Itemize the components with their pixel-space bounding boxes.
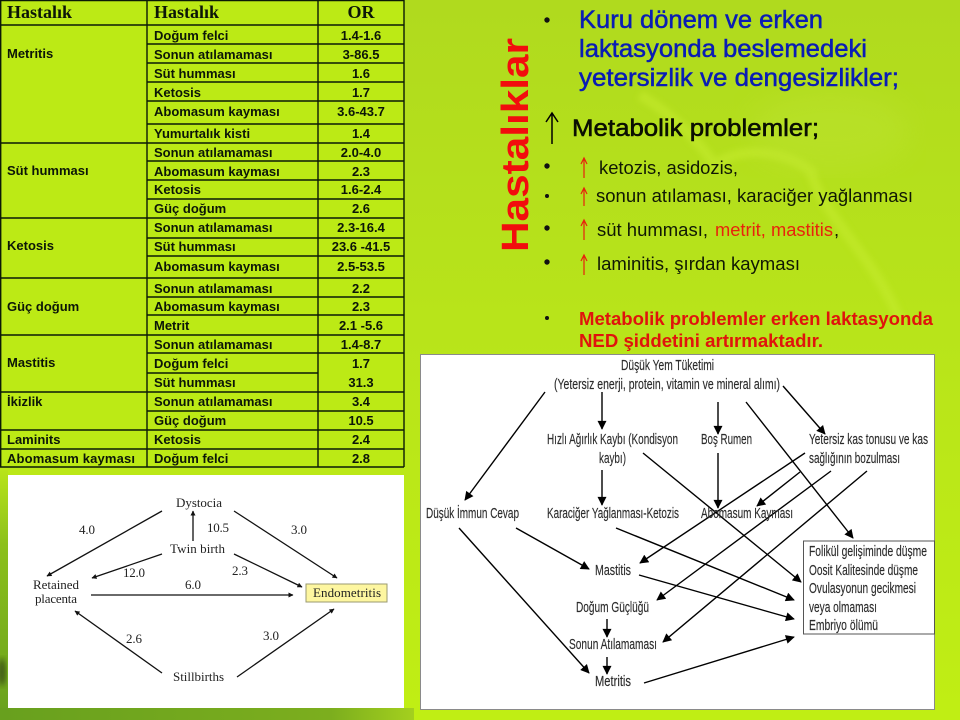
labels: placenta [35,591,77,606]
right column: OR values: 3.4 [352,394,371,409]
middle column: related diseases: Sonun atılamaması [154,337,272,352]
labels: Karaciğer Yağlanması-Ketozis [547,505,679,522]
middle column: related diseases: Abomasum kayması [154,259,280,274]
left column: primary diseases: Abomasum kayması [7,451,135,466]
table header: Hastalık [7,2,72,22]
right column: OR values: 1.4-8.7 [341,337,381,352]
middle column: related diseases: Abomasum kayması [154,299,280,314]
left column: primary diseases: Mastitis [7,355,55,370]
labels: Düşük İmmun Cevap [426,504,519,522]
table header [7,2,376,22]
text block: nutrition heading: Kuru dönem ve erken [579,6,823,34]
left column: primary diseases: Güç doğum [7,299,79,314]
middle column: related diseases: Yumurtalık kisti [154,126,250,141]
right column: OR values: 2.1 -5.6 [339,318,383,333]
right column: OR values [332,28,390,466]
middle column: related diseases: Abomasum kayması [154,164,280,179]
right column: OR values: 2.3 [352,164,370,179]
right column: OR values: 2.3 [352,299,370,314]
panel: endometritis risk diagram [8,475,404,708]
middle column: related diseases: Metrit [154,318,190,333]
outcomes box: veya olmaması [809,599,877,616]
middle column: related diseases: Sonun atılamaması [154,220,272,235]
right column: OR values: 2.2 [352,281,370,296]
labels: 10.5 [207,520,229,535]
labels: Retained [33,577,80,592]
right column: OR values: 3-86.5 [343,47,379,62]
right column: OR values: 2.5-53.5 [337,259,385,274]
bullet list: problems: sonun atılaması, karaciğer yağlanması [596,185,913,206]
labels: Boş Rumen [701,431,752,448]
right column: OR values: 1.6-2.4 [341,182,382,197]
labels: Abomasum Kayması [701,505,793,522]
outcomes box [804,541,934,634]
right column: OR values: 1.6 [352,66,370,81]
left column: primary diseases: Metritis [7,46,53,61]
labels [33,495,381,684]
middle column: related diseases: Ketosis [154,182,201,197]
labels: Twin birth [170,541,226,556]
labels [426,357,928,690]
bullet list: problems [544,157,913,275]
right column: OR values: 10.5 [348,413,374,428]
callout: NED [545,309,934,351]
callout: NED: Metabolik problemler erken laktasyonda [579,309,934,329]
table: disease odds ratios [0,0,404,467]
right column: OR values: 31.3 [348,375,374,390]
middle column: related diseases: Sonun atılamaması [154,47,272,62]
middle column: related diseases: Ketosis [154,432,201,447]
labels: sağlığının bozulması [809,450,900,467]
labels: 3.0 [263,628,279,643]
right column: OR values: 1.4 [352,126,371,141]
right column: OR values: 1.7 [352,85,370,100]
labels: 3.0 [291,522,307,537]
labels: Doğum Güçlüğü [576,599,649,616]
text block: nutrition heading: yetersizlik ve dengesizlikler; [579,64,899,92]
labels: 6.0 [185,577,201,592]
middle column: related diseases: Ketosis [154,85,201,100]
text block: metabolic problems: Metabolik problemler; [572,115,819,142]
labels: (Yetersiz enerji, protein, vitamin ve mineral alımı) [554,376,780,393]
middle column: related diseases: Güç doğum [154,201,226,216]
left column: primary diseases: Süt humması [7,163,89,178]
arrows [459,386,867,683]
middle column: related diseases: Süt humması [154,375,236,390]
outcomes box: Embriyo ölümü [809,617,878,634]
middle column: related diseases: Süt humması [154,239,236,254]
callout: NED: NED şiddetini artırmaktadır. [579,331,823,351]
right column: OR values: 2.3-16.4 [337,220,386,235]
left column: primary diseases [7,46,135,466]
left column: primary diseases: Laminits [7,432,60,447]
labels: 2.6 [126,631,142,646]
middle column: related diseases: Süt humması [154,66,236,81]
right column: OR values: 1.4-1.6 [341,28,381,43]
labels: Mastitis [595,562,631,579]
bullet list: problems: ketozis, asidozis, [599,157,738,178]
table header: OR [348,2,376,22]
bullet list: problems: metrit, mastitis [715,219,833,240]
labels: 4.0 [79,522,95,537]
middle column: related diseases [154,28,280,466]
right column: OR values: 3.6-43.7 [337,104,385,119]
bullet list: problems: , [834,219,839,240]
labels: Dystocia [176,495,222,510]
middle column: related diseases: Doğum felci [154,28,228,43]
right column: OR values: 2.4 [352,432,371,447]
vertical heading: Hastalıklar [495,38,537,252]
middle column: related diseases: Güç doğum [154,413,226,428]
middle column: related diseases: Doğum felci [154,356,228,371]
arrows [47,511,337,677]
middle column: related diseases: Doğum felci [154,451,228,466]
panel: low feed intake flow diagram [420,354,934,710]
middle column: related diseases: Abomasum kayması [154,104,280,119]
text block: nutrition heading [544,6,899,92]
labels: Hızlı Ağırlık Kaybı (Kondisyon [547,431,678,448]
labels: Metritis [595,673,631,690]
labels: Düşük Yem Tüketimi [621,357,714,374]
labels: Sonun Atılamaması [569,636,657,653]
left column: primary diseases: İkizlik [7,394,43,409]
right column: OR values: 2.8 [352,451,370,466]
middle column: related diseases: Sonun atılamaması [154,281,272,296]
bullet list: problems: laminitis, şırdan kayması [597,253,800,274]
right column: OR values: 1.7 [352,356,370,371]
table grid [0,0,404,467]
labels: 2.3 [232,563,248,578]
labels: Endometritis [313,585,381,600]
right column: OR values: 2.0-4.0 [341,145,381,160]
right column: OR values: 23.6 -41.5 [332,239,390,254]
bullet list: problems: süt humması, [597,219,708,240]
table header: Hastalık [154,2,219,22]
labels: kaybı) [599,450,626,467]
text block: nutrition heading: laktasyonda beslemedeki [579,35,867,63]
labels: 12.0 [123,565,145,580]
middle column: related diseases: Sonun atılamaması [154,394,272,409]
left column: primary diseases: Ketosis [7,238,54,253]
endometritis box [306,584,387,602]
labels: Stillbirths [173,669,224,684]
middle column: related diseases: Sonun atılamaması [154,145,272,160]
right column: OR values: 2.6 [352,201,370,216]
